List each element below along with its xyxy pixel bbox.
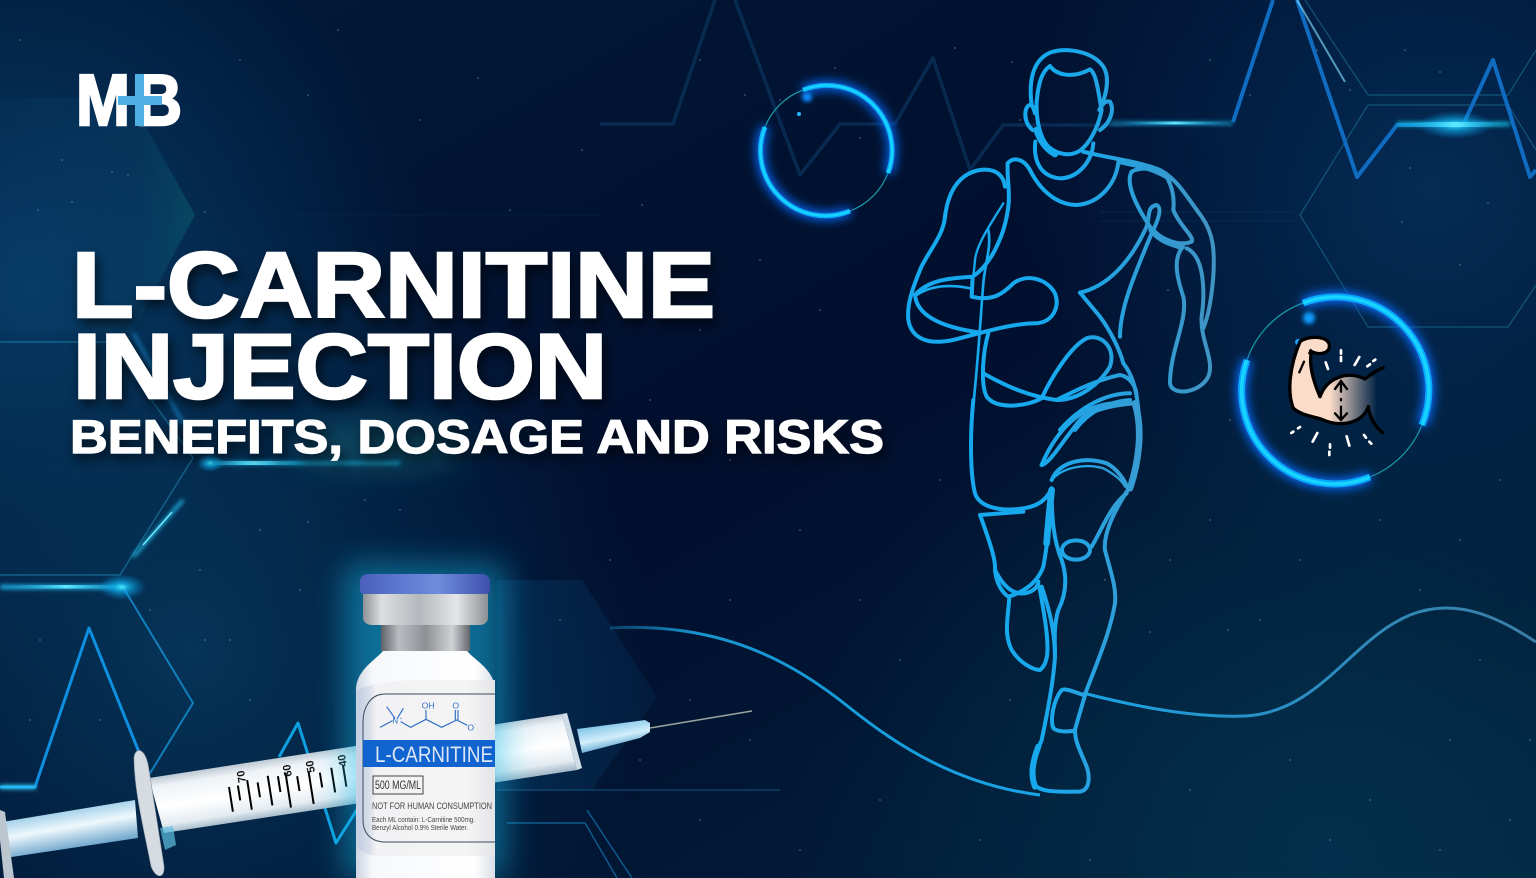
hub <box>577 720 650 753</box>
syringe <box>0 711 752 878</box>
scale numbers: 40 <box>336 753 350 768</box>
vial body <box>356 648 495 878</box>
needle <box>650 711 752 728</box>
vial <box>345 565 505 878</box>
scale numbers: 60 <box>281 763 295 778</box>
molecule: L-carnitine: OH <box>422 700 435 710</box>
title: BENEFITS, DOSAGE AND RISKS <box>70 410 884 463</box>
logo: M+B: M <box>76 61 130 141</box>
scale numbers <box>235 753 350 784</box>
ring: lower right with icon <box>1242 297 1429 484</box>
molecule: L-carnitine: O <box>452 700 459 710</box>
ingredients: Each ML contain: L-Carnitine 500mg. <box>372 817 475 824</box>
solvent: Benzyl Alcohol 0.9% Sterile Water. <box>372 825 468 832</box>
warning: NOT FOR HUMAN CONSUMPTION <box>372 801 492 811</box>
silver collar <box>363 593 488 625</box>
logo: M+B: B <box>136 61 182 141</box>
product name: L-CARNITINE <box>375 742 493 767</box>
title: INJECTION <box>73 316 607 418</box>
dose text: 500 MG/ML <box>375 780 421 792</box>
title <box>70 233 884 463</box>
ECG line: faint top <box>600 0 1233 175</box>
flange <box>134 750 164 876</box>
label <box>357 680 495 856</box>
flowing ribbon line <box>610 608 1536 795</box>
molecule: L-carnitine: + <box>400 716 403 721</box>
ECG line: lower left <box>0 333 470 843</box>
vial neck <box>381 625 470 651</box>
ring: upper left <box>760 85 892 216</box>
logo: M+B <box>76 61 182 141</box>
blue cap <box>360 574 490 594</box>
molecule: L-carnitine: N <box>392 716 398 725</box>
running man: upper body <box>908 50 1214 430</box>
molecule: L-carnitine <box>380 700 476 733</box>
tick marks <box>228 764 348 817</box>
title: L-CARNITINE <box>72 233 715 337</box>
barrel <box>149 713 582 850</box>
molecule: L-carnitine: - <box>474 722 476 727</box>
scale numbers: 50 <box>304 759 318 774</box>
molecule: L-carnitine: O <box>467 723 474 733</box>
plunger <box>2 800 138 858</box>
running man: lower body <box>971 400 1139 792</box>
scale numbers: 70 <box>235 769 249 784</box>
blue band <box>363 740 495 767</box>
icon: flexed arm muscle <box>1290 337 1383 455</box>
dose box <box>373 776 423 794</box>
ECG line: top right <box>1110 0 1536 177</box>
